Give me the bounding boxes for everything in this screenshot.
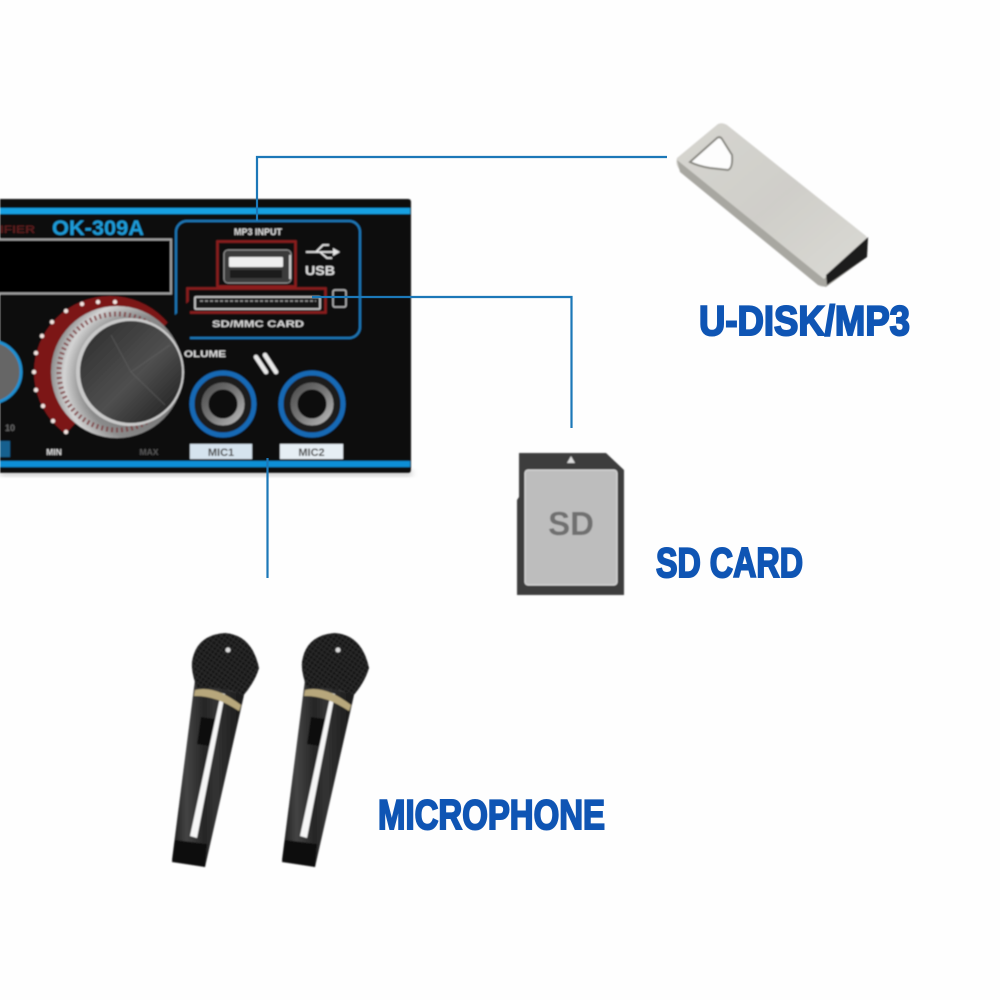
left partial knob <box>0 341 21 457</box>
amplifier front panel <box>0 199 412 476</box>
mic jack 1 <box>192 373 254 435</box>
label: U-disk/MP3: U-DISK/MP3 <box>699 297 910 344</box>
mic jack 2 <box>281 373 343 435</box>
display window <box>0 240 171 294</box>
mic 2 label <box>280 444 343 459</box>
mic 1 label: MIC1 <box>208 447 234 459</box>
USB symbol and label: USB <box>305 263 335 278</box>
label: microphone: MICROPHONE <box>378 791 605 838</box>
SD card lettering: SD <box>548 505 594 542</box>
input group box <box>176 221 360 338</box>
icon: microphone right <box>282 633 369 867</box>
icon: SD card <box>517 453 624 595</box>
left partial knob: 10 <box>5 423 15 433</box>
connector line: USB to U-disk <box>257 157 667 221</box>
volume knob <box>32 296 226 460</box>
icon: U-disk <box>676 123 868 287</box>
connector line: SD slot to SD card <box>312 297 572 428</box>
USB port <box>218 242 296 286</box>
microphone glyph <box>256 355 276 372</box>
SD card glyph <box>333 290 346 307</box>
label: SD card: SD CARD <box>656 539 803 586</box>
mic 1 label <box>190 444 252 459</box>
USB symbol and label <box>305 245 340 278</box>
MP3 input label: MP3 INPUT <box>234 227 283 237</box>
min label: MIN <box>46 447 62 457</box>
SD/MMC card label: SD/MMC CARD <box>212 319 304 330</box>
max label: MAX <box>140 447 159 457</box>
icon: microphone left <box>172 633 259 867</box>
volume label: OLUME <box>184 349 226 359</box>
SD card slot <box>188 288 326 312</box>
connector line: mic jacks to microphone <box>266 458 269 578</box>
brand text fragment: IFIER <box>0 224 35 236</box>
mic 2 label: MIC2 <box>298 447 325 459</box>
model name: OK-309A <box>52 217 144 240</box>
